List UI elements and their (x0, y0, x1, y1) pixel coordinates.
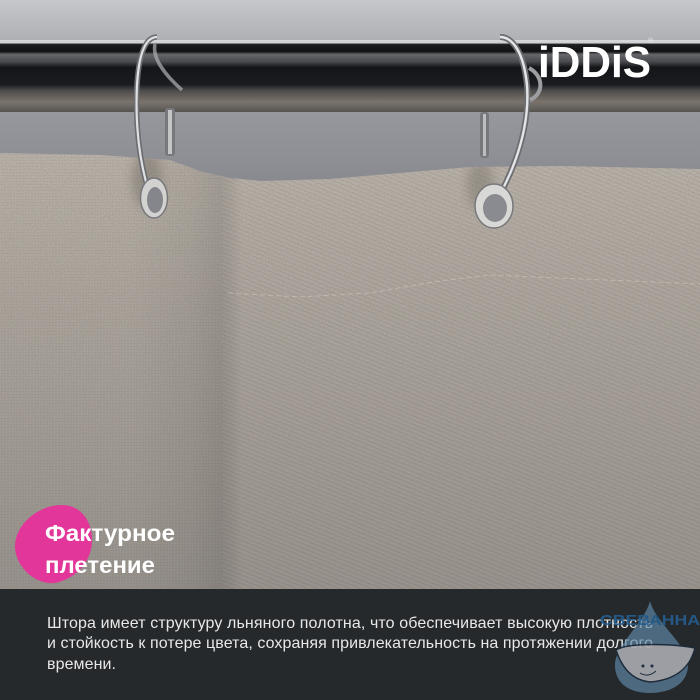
pink blob (15, 505, 92, 583)
logo: iddis: ® (648, 37, 654, 45)
logo: iddis: iDDiS (538, 38, 651, 87)
bottom dark panel (0, 589, 700, 700)
description text (47, 615, 653, 673)
curtain fabric (0, 150, 700, 590)
left curtain ring and grommet (136, 37, 182, 218)
right curtain ring and grommet (475, 37, 540, 228)
heading (45, 520, 175, 578)
chrome rod (0, 40, 700, 112)
description text: времени. (47, 656, 116, 673)
description text: и стойкость к потере цвета, сохраняя привлекательность на протяжении долгого (47, 635, 653, 652)
description text: Штора имеет структуру льняного полотна, что обеспечивает высокую плотность (47, 615, 653, 632)
watermark: bath in water drop: СВЕВАННА (600, 612, 700, 629)
watermark: bath in water drop (600, 601, 700, 693)
wall above rod (0, 0, 700, 42)
heading: плетение (45, 552, 155, 578)
wall below rod (0, 108, 700, 193)
heading: Фактурное (45, 520, 175, 546)
